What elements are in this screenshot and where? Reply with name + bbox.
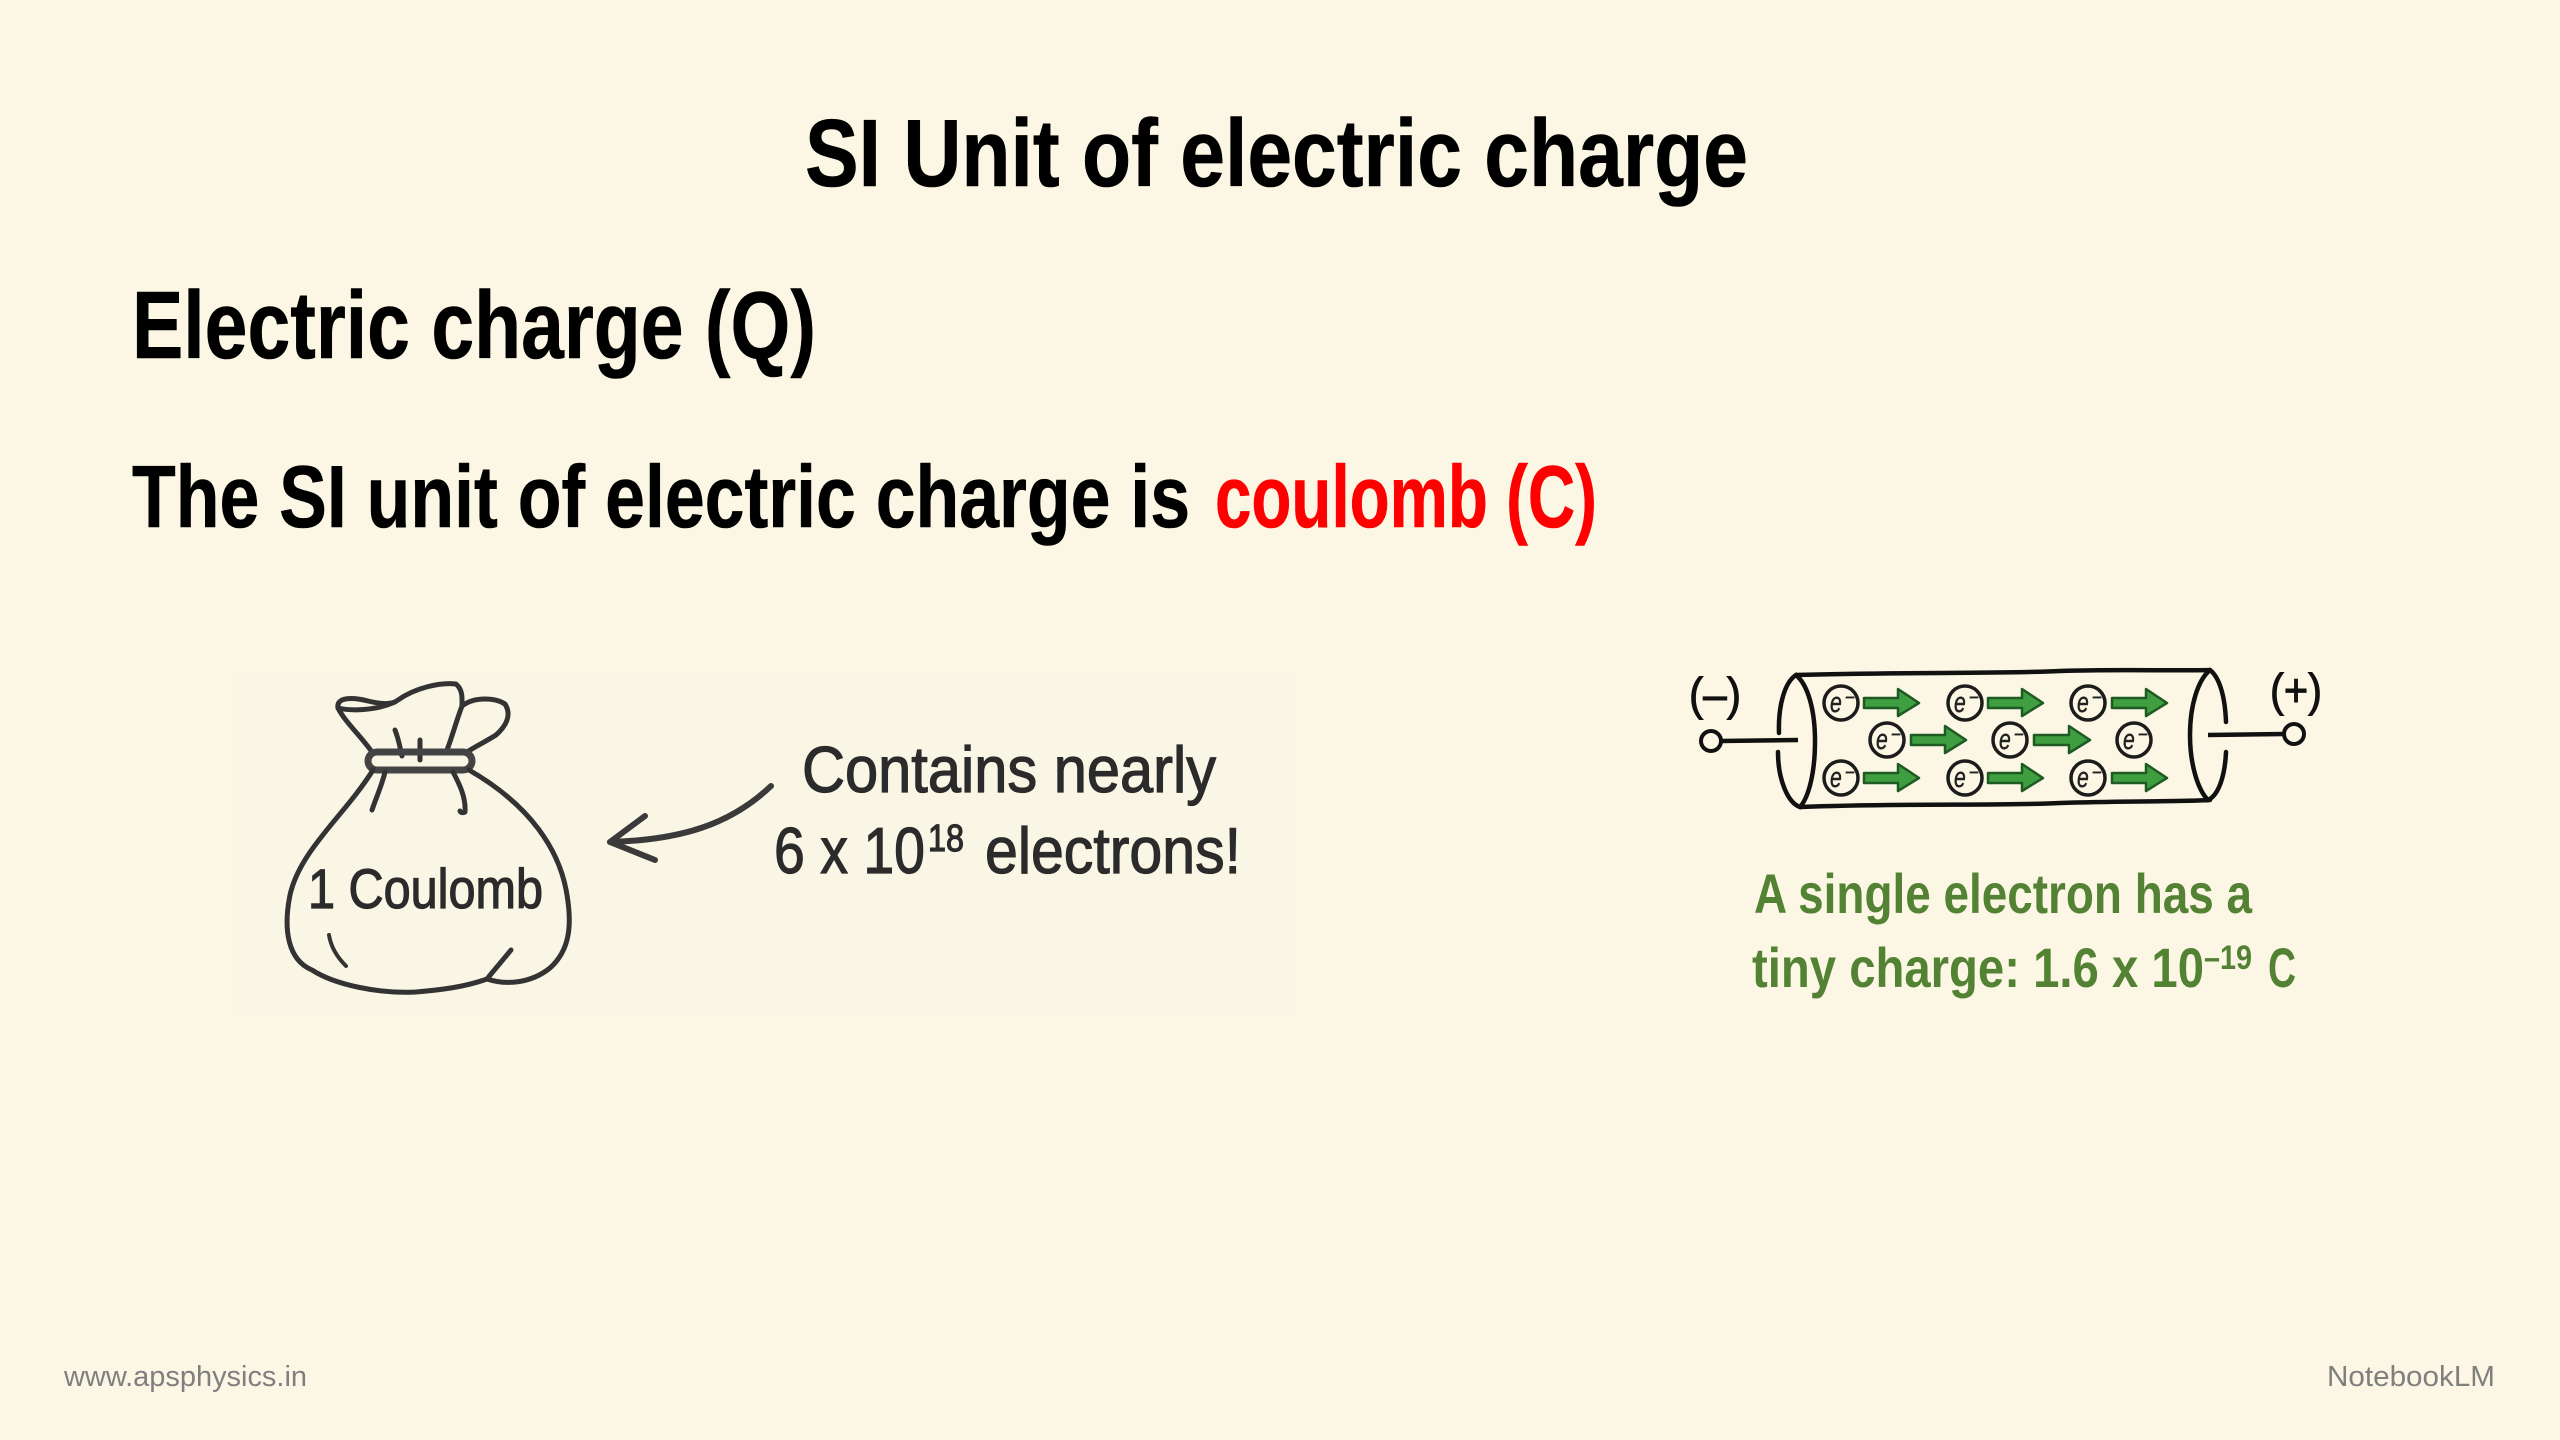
caption: charge of a single electron: C — [2268, 936, 2296, 999]
caption: charge of a single electron: A single electron has a — [1754, 862, 2253, 925]
callout: electrons in a coulomb: 18 — [928, 818, 964, 860]
statement: SI unit is coulomb: The SI unit of electric charge is — [132, 447, 1190, 546]
negative terminal: (–) — [1689, 668, 1741, 720]
callout: electrons in a coulomb — [774, 733, 1241, 887]
callout: electrons in a coulomb: electrons! — [985, 814, 1241, 887]
electrons: e⁻ — [1954, 762, 1979, 794]
label: 1 Coulomb: 1 Coulomb — [308, 857, 543, 920]
green flow arrows — [1864, 689, 2167, 791]
caption: charge of a single electron: –19 — [2204, 939, 2252, 977]
positive terminal: (+) — [2270, 664, 2322, 716]
negative terminal — [1689, 668, 1798, 751]
highlighted unit name: coulomb (C) — [1215, 447, 1597, 546]
caption: charge of a single electron — [1752, 862, 2296, 999]
footer: website: www.apsphysics.in — [63, 1361, 307, 1393]
callout: electrons in a coulomb: 6 x 10 — [774, 814, 925, 887]
electrons — [1824, 686, 2151, 795]
diagram: electrons flowing through a conductor — [1689, 664, 2322, 807]
arrow: to bag — [610, 786, 771, 860]
electrons: e⁻ — [1876, 724, 1901, 756]
heading: electric charge: Electric charge (Q) — [132, 272, 816, 379]
caption: charge of a single electron: tiny charge: 1.6 x 10 — [1752, 936, 2204, 999]
electrons: e⁻ — [1954, 687, 1979, 719]
electrons: e⁻ — [1830, 762, 1855, 794]
conductor tube — [1778, 670, 2226, 807]
panel: coulomb money bag illustration — [236, 672, 1296, 1016]
electrons: e⁻ — [2077, 687, 2102, 719]
callout: electrons in a coulomb: Contains nearly — [802, 733, 1216, 806]
icon: bag — [287, 684, 569, 992]
footer: NotebookLM: NotebookLM — [2327, 1361, 2495, 1393]
electrons: e⁻ — [2123, 724, 2148, 756]
positive terminal — [2208, 664, 2322, 744]
title: SI Unit of electric charge — [805, 100, 1748, 207]
electrons: e⁻ — [2077, 762, 2102, 794]
electrons: e⁻ — [1999, 724, 2024, 756]
electrons: e⁻ — [1830, 687, 1855, 719]
